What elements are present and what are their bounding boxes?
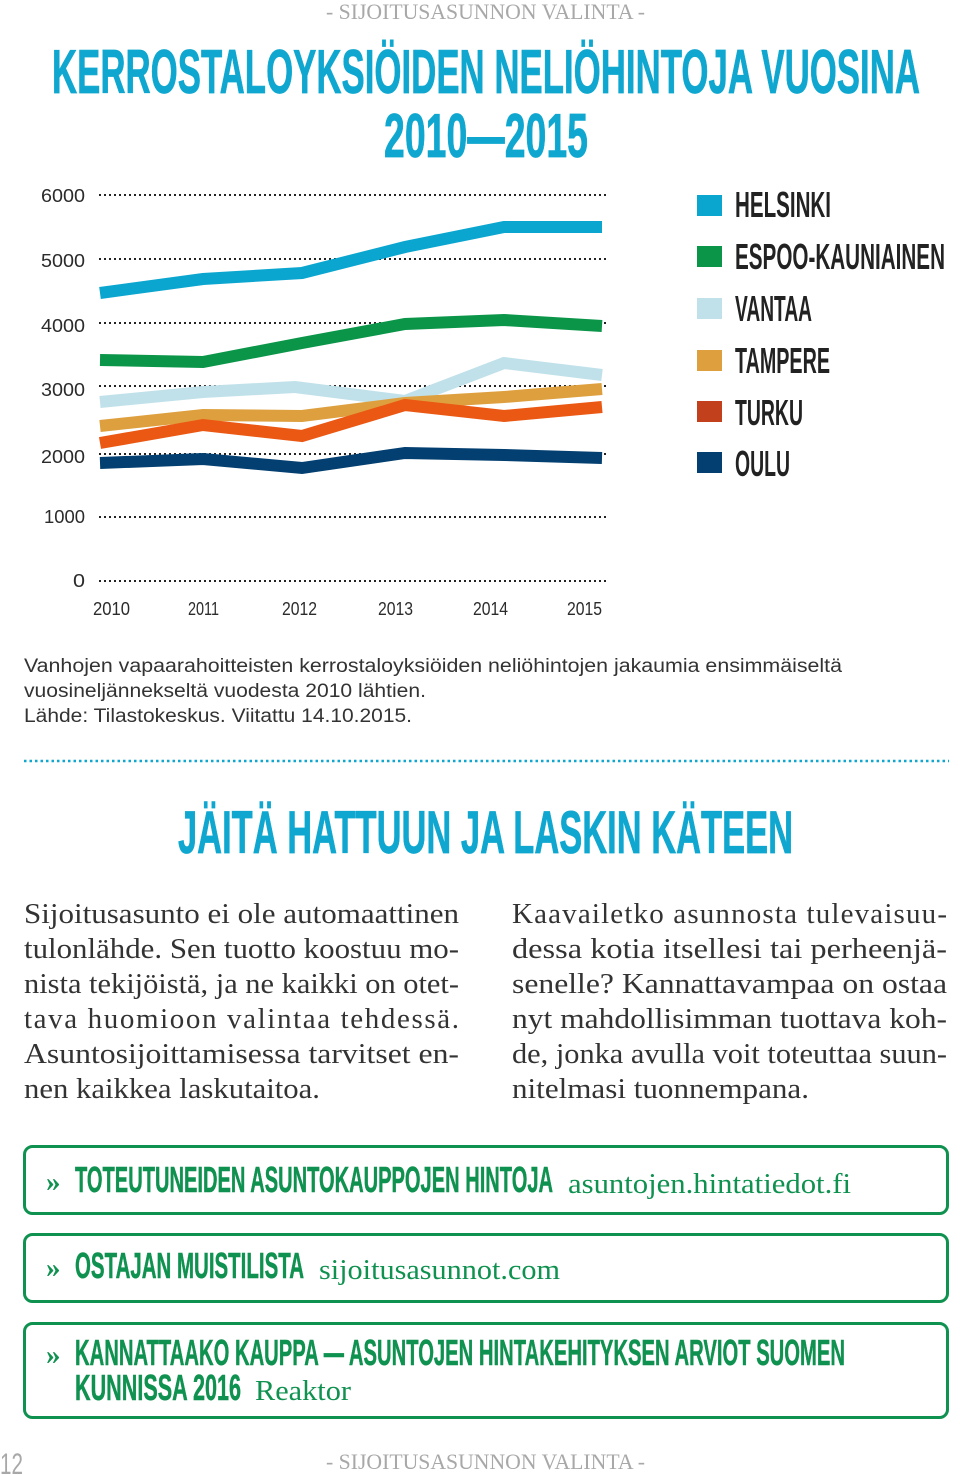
x axis labels: 2010 <box>93 599 130 619</box>
legend item: Vantaa <box>697 288 812 329</box>
text block: right column: de, jonka avulla voit toteuttaa suun- <box>512 1038 947 1070</box>
text block: left column: nen kaikkea laskutaitoa. <box>24 1073 320 1105</box>
y axis labels: 4000 <box>41 316 85 336</box>
chart caption: Lähde: Tilastokeskus. Viitattu 14.10.2015. <box>24 706 412 727</box>
line chart <box>41 186 606 619</box>
line: Helsinki <box>100 227 602 293</box>
chart caption: vuosineljännekseltä vuodesta 2010 lähtien. <box>24 681 426 702</box>
link box: kannattaako kauppa: KUNNISSA 2016 <box>75 1367 241 1408</box>
legend item: Vantaa: VANTAA <box>735 288 812 329</box>
y axis labels: 0 <box>73 571 85 591</box>
y axis labels: 5000 <box>41 251 85 271</box>
legend item: Helsinki: HELSINKI <box>735 184 831 225</box>
link box: ostajan muistilista: » <box>46 1252 60 1284</box>
line: Vantaa <box>100 363 602 402</box>
link box: ostajan muistilista: OSTAJAN MUISTILISTA <box>75 1245 304 1286</box>
chart caption: Vanhojen vapaarahoitteisten kerrostaloyksiöiden neliöhintojen jakaumia ensimmäiseltä <box>24 656 842 677</box>
link box: toteutuneiden asuntokauppojen hintoja: TOTEUTUNEIDEN ASUNTOKAUPPOJEN HINTOJA <box>75 1159 553 1200</box>
y axis labels: 2000 <box>41 447 85 467</box>
line: Oulu <box>100 453 602 468</box>
gridlines <box>99 195 606 581</box>
text block: right column: senelle? Kannattavampaa on ostaa <box>512 968 947 1000</box>
link box: kannattaako kauppa: » <box>46 1339 60 1371</box>
legend item: Turku: TURKU <box>735 392 803 433</box>
text block: left column: tava huomioon valintaa tehdessä. <box>24 1003 459 1035</box>
title <box>52 38 920 171</box>
y axis labels: 3000 <box>41 380 85 400</box>
line: Tampere <box>100 389 602 426</box>
x axis labels: 2013 <box>378 599 413 619</box>
y axis labels <box>41 186 85 591</box>
text block: right column: dessa kotia itsellesi tai perheenjä- <box>512 933 947 965</box>
x axis labels: 2014 <box>473 599 508 619</box>
link box: toteutuneiden asuntokauppojen hintoja: » <box>46 1166 60 1198</box>
footer running title: - SIJOITUSASUNNON VALINTA - <box>326 1449 645 1474</box>
legend item: Tampere: TAMPERE <box>735 340 830 381</box>
link box: ostajan muistilista: sijoitusasunnot.com <box>319 1254 560 1286</box>
y axis labels: 1000 <box>44 507 85 527</box>
text block: right column: nyt mahdollisimman tuottava koh- <box>512 1003 947 1035</box>
line: Espoo-Kauniainen <box>100 320 602 362</box>
link box: ostajan muistilista <box>24 1234 948 1302</box>
legend item: Tampere <box>697 340 830 381</box>
x axis labels <box>93 599 602 619</box>
x axis labels: 2011 <box>188 599 219 619</box>
link box: kannattaako kauppa <box>24 1324 948 1418</box>
link box: toteutuneiden asuntokauppojen hintoja <box>24 1146 948 1214</box>
text block: right column <box>512 898 947 1105</box>
line: Turku <box>100 405 602 443</box>
text block: right column: nitelmasi tuonnempana. <box>512 1073 809 1105</box>
text block: left column: nista tekijöistä, ja ne kaikki on otet- <box>24 968 459 1000</box>
x axis labels: 2012 <box>282 599 317 619</box>
title: 2010—2015 <box>384 102 588 171</box>
text block: left column: tulonlähde. Sen tuotto koostuu mo- <box>24 933 459 965</box>
text block: left column <box>24 898 460 1105</box>
legend <box>697 184 945 484</box>
legend item: Oulu: OULU <box>735 443 790 484</box>
link box: toteutuneiden asuntokauppojen hintoja: asuntojen.hintatiedot.fi <box>568 1168 851 1200</box>
text block: left column: Asuntosijoittamisessa tarvitset en- <box>24 1038 459 1070</box>
link box: kannattaako kauppa: Reaktor <box>255 1375 351 1407</box>
text block: left column: Sijoitusasunto ei ole automaattinen <box>24 898 460 930</box>
legend item: Helsinki <box>697 184 831 225</box>
chart caption <box>24 656 842 727</box>
text block: right column: Kaavailetko asunnosta tulevaisuu- <box>512 898 947 930</box>
legend item: Oulu <box>697 443 790 484</box>
legend item: Turku <box>697 392 803 433</box>
x axis labels: 2015 <box>567 599 602 619</box>
y axis labels: 6000 <box>41 186 85 206</box>
